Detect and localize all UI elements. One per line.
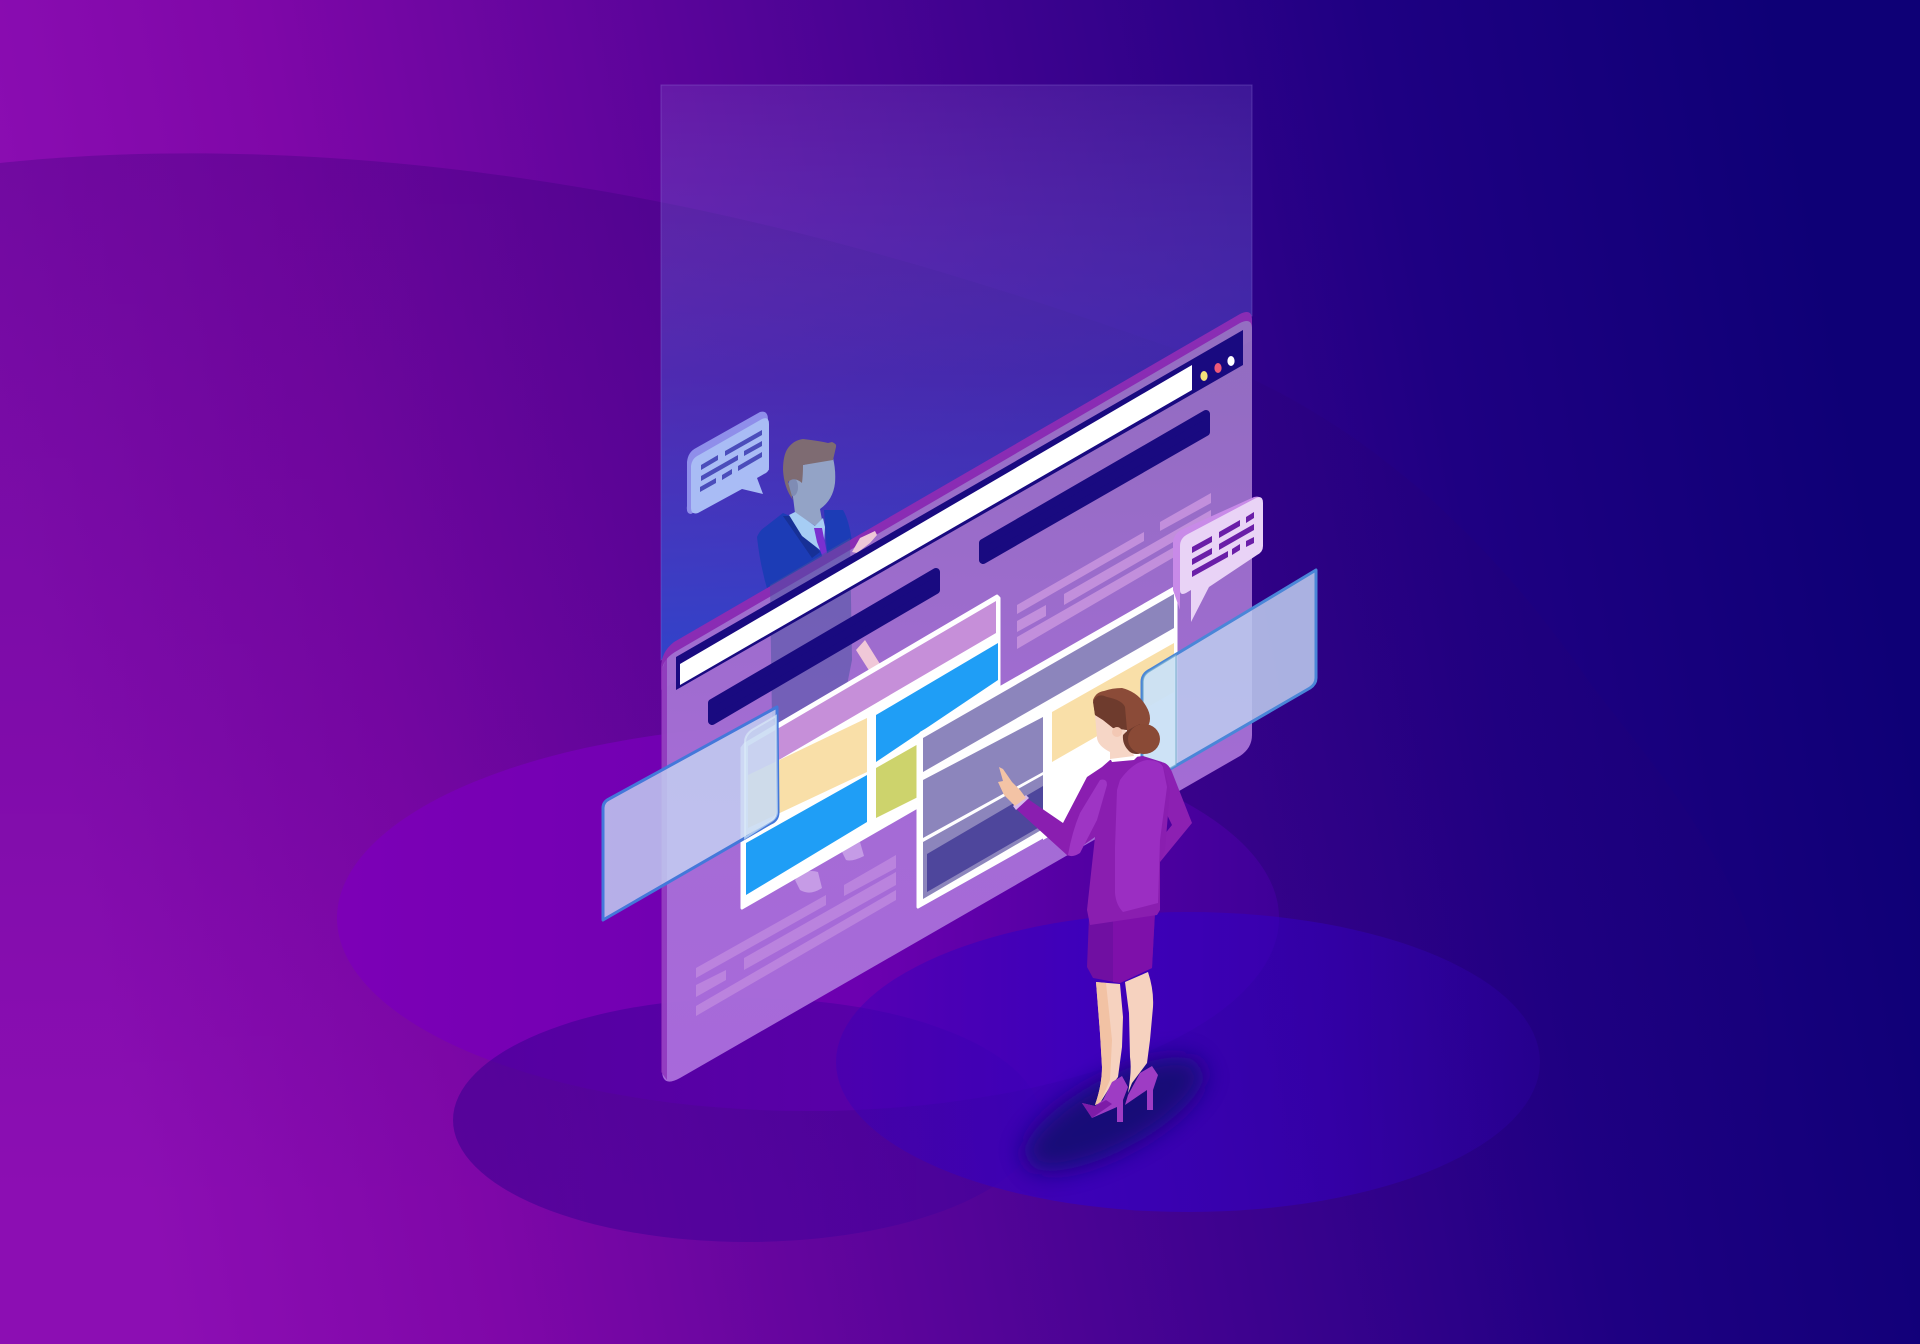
man ear	[788, 478, 798, 496]
woman floor shadow	[1009, 1035, 1219, 1193]
man lapel shade	[783, 516, 820, 558]
collar	[1110, 754, 1140, 762]
address bar	[676, 330, 1243, 690]
bubble front	[691, 418, 769, 513]
hair bun shade	[1123, 724, 1145, 754]
jacket highlight back	[1115, 760, 1167, 912]
address bar input	[680, 365, 1192, 685]
middle panel	[923, 717, 1043, 838]
man hair	[783, 439, 836, 500]
hand	[998, 767, 1026, 806]
leg front	[1095, 982, 1123, 1105]
man shirt collar	[789, 512, 825, 550]
right content card	[918, 588, 1176, 907]
web page panel	[661, 312, 1252, 1082]
man tie	[814, 528, 827, 558]
shoe shade	[1082, 1100, 1112, 1118]
bubble side	[687, 412, 769, 514]
floor ellipse: left	[453, 998, 1041, 1242]
man lower hand	[856, 640, 880, 672]
hair	[1093, 688, 1150, 752]
ear	[1112, 727, 1122, 737]
yellow panel	[1052, 643, 1174, 762]
jacket	[1015, 756, 1170, 925]
glass body	[603, 707, 778, 920]
window dot yellow	[1200, 371, 1208, 381]
glass body	[1142, 570, 1316, 782]
man upper body	[757, 439, 852, 592]
speech bubble right	[1173, 497, 1263, 622]
bubble front	[1180, 497, 1263, 622]
glass card right	[1142, 570, 1316, 782]
bubble side	[1173, 497, 1262, 610]
lower panel	[923, 775, 1043, 899]
glass panel	[661, 85, 1252, 660]
glass card left	[603, 707, 778, 920]
man suit	[757, 510, 852, 592]
floor ellipse: large	[337, 725, 1279, 1111]
neck and face	[1095, 705, 1134, 759]
skirt shade	[1113, 912, 1155, 983]
panel left side strip	[661, 656, 667, 1080]
cuff	[1013, 795, 1029, 810]
card band lilac	[748, 601, 996, 778]
heading bar right	[983, 414, 1206, 560]
leg front shade	[1095, 982, 1112, 1105]
bubble text lines	[1192, 512, 1254, 577]
man ghost through panel	[770, 538, 864, 893]
glass inner overlap	[745, 716, 777, 838]
heading bar left	[712, 572, 936, 721]
card frame	[742, 596, 999, 908]
window dot red	[1214, 363, 1222, 373]
skirt	[1087, 912, 1155, 983]
glass inner overlap	[1143, 655, 1176, 780]
back arm	[1152, 762, 1192, 862]
yellow block	[748, 718, 867, 828]
hair bun	[1128, 724, 1160, 754]
speech bubble left	[687, 412, 769, 514]
card frame	[918, 588, 1176, 907]
shoe front	[1082, 1076, 1128, 1122]
green block	[876, 743, 920, 818]
top band	[923, 594, 1174, 772]
left content card	[742, 596, 999, 908]
man raised hand	[852, 531, 877, 553]
text lines upper	[1017, 493, 1211, 649]
lower panel inner	[927, 786, 1043, 892]
man neck and face	[791, 458, 835, 527]
bubble text lines	[700, 430, 762, 492]
blue block upper	[876, 643, 998, 762]
leg back	[1125, 972, 1153, 1093]
white stripe	[1043, 708, 1052, 840]
text lines lower	[696, 855, 896, 1016]
blue block lower	[746, 775, 867, 895]
floor ellipse: right	[836, 912, 1540, 1212]
shoe back	[1125, 1066, 1158, 1110]
woman	[998, 688, 1192, 1122]
window dot white	[1227, 356, 1235, 366]
jacket highlight sleeve	[1068, 780, 1107, 856]
panel top edge	[661, 312, 1252, 690]
hair shade	[1093, 695, 1127, 730]
panel body	[662, 321, 1252, 1082]
